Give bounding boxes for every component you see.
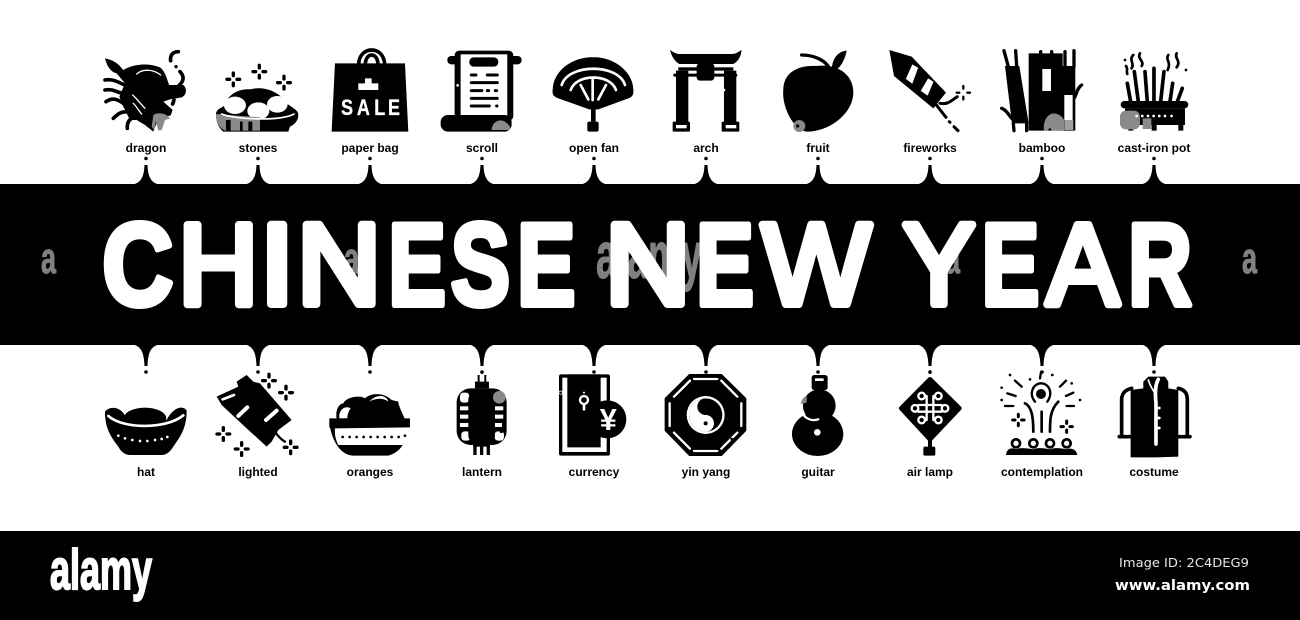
icon: lantern xyxy=(457,371,507,455)
image id: Image ID: 2C4DEG9 xyxy=(1119,555,1249,570)
icon: paper bag xyxy=(332,50,408,132)
icon: open fan xyxy=(553,57,633,132)
title band with connector ticks xyxy=(0,157,1300,374)
title: S xyxy=(451,199,510,330)
icon: arch xyxy=(670,50,742,132)
icon: guitar (gourd) xyxy=(792,372,843,456)
title: E xyxy=(696,199,754,330)
title: N xyxy=(297,201,381,329)
label: yin yang: yin yang xyxy=(682,465,730,479)
label: contemplation: contemplation xyxy=(1001,465,1083,479)
icon: stones xyxy=(216,65,298,132)
logo: alamy: alamy xyxy=(50,538,152,602)
title: A xyxy=(1047,201,1119,329)
title: E xyxy=(517,199,576,330)
title: N xyxy=(605,201,690,329)
icon: currency envelope xyxy=(559,374,626,456)
label: fireworks: fireworks xyxy=(903,141,957,155)
watermark letters in band: alamy xyxy=(596,218,702,292)
label: air lamp: air lamp xyxy=(907,465,953,479)
title: H xyxy=(178,201,258,329)
label: hat: hat xyxy=(137,465,155,479)
icon: currency envelope: ¥ xyxy=(600,403,617,437)
label: fruit: fruit xyxy=(806,141,830,155)
label: lighted: lighted xyxy=(238,465,278,479)
icon: paper bag: SALE xyxy=(341,96,400,120)
label: arch: arch xyxy=(693,141,719,155)
title: I xyxy=(260,201,294,329)
label: dragon: dragon xyxy=(126,141,166,155)
watermark letters in band: a xyxy=(1242,234,1257,283)
icon: cast-iron pot xyxy=(1120,53,1188,131)
icon: dragon xyxy=(105,52,186,132)
label: paper bag: paper bag xyxy=(341,141,399,155)
footer bar xyxy=(0,531,1300,620)
icon: yin yang octagon xyxy=(665,374,746,456)
title: R xyxy=(1128,199,1192,330)
title: Y xyxy=(903,201,975,329)
label: lantern: lantern xyxy=(462,465,502,479)
title: E xyxy=(388,199,446,330)
label: oranges: oranges xyxy=(347,465,394,479)
label: scroll: scroll xyxy=(466,141,498,155)
watermark letters in band: a xyxy=(945,234,960,283)
title xyxy=(102,199,1192,330)
title: C xyxy=(102,199,173,330)
label: currency: currency xyxy=(569,465,620,479)
watermark letters in band xyxy=(41,218,1257,292)
label: open fan: open fan xyxy=(569,141,619,155)
label: costume: costume xyxy=(1129,465,1179,479)
icon: lighted firecrackers xyxy=(217,374,297,455)
watermark letters in band: a xyxy=(41,234,56,283)
label: stones: stones xyxy=(239,141,278,155)
title: W xyxy=(762,201,871,329)
icon: air lamp knot xyxy=(901,371,959,456)
watermark letters in band: a xyxy=(344,234,359,283)
icon: scroll xyxy=(441,51,522,132)
icon: bamboo xyxy=(1002,51,1082,131)
icon: contemplation fireworks xyxy=(1000,372,1081,455)
website: www.alamy.com xyxy=(1115,578,1250,594)
icon: fruit xyxy=(783,51,853,132)
label: cast-iron pot: cast-iron pot xyxy=(1118,141,1190,155)
label: guitar: guitar xyxy=(801,465,835,479)
icon: fireworks rocket xyxy=(889,50,970,131)
icon: hat (gold ingot) xyxy=(105,408,187,455)
label: bamboo: bamboo xyxy=(1019,141,1065,155)
icon: costume jacket xyxy=(1119,371,1190,457)
title: E xyxy=(982,199,1040,330)
icon: bowl of oranges xyxy=(329,394,410,456)
